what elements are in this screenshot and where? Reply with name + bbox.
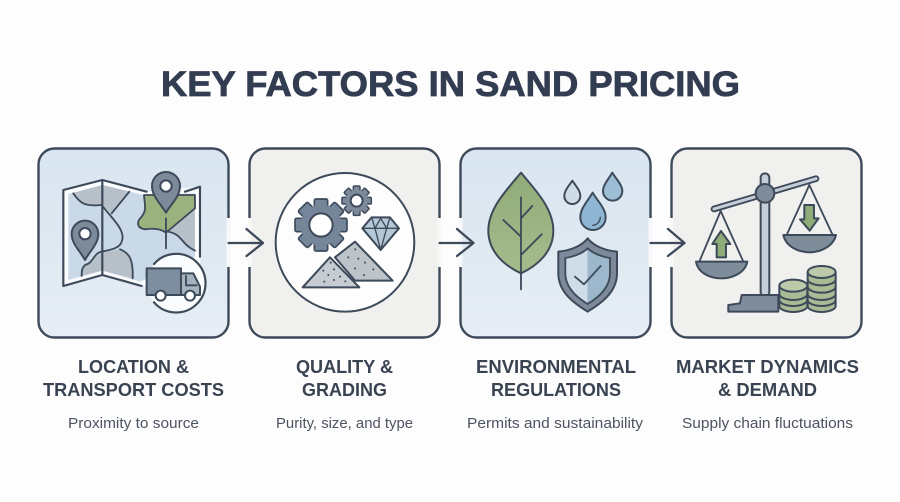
- text block: environmental regulations: Permits and sustainability: [467, 415, 644, 432]
- text block: environmental regulations: [467, 357, 644, 432]
- arrow: environmental to market: [650, 229, 684, 256]
- text block: location and transport costs: [43, 357, 224, 432]
- text block: quality and grading: Purity, size, and type: [276, 415, 413, 432]
- panel: quality and grading: [248, 148, 442, 338]
- icon: scale base: [728, 295, 778, 312]
- icon: left pan with up arrow: [696, 211, 747, 278]
- icon: diamond: [362, 217, 399, 250]
- icon: large map pin: [152, 172, 180, 213]
- text block: location and transport costs: LOCATION &: [78, 357, 189, 377]
- icon: shield with check: [558, 238, 617, 312]
- text block: market dynamics and demand: & DEMAND: [718, 380, 817, 400]
- icon: leaf, drops and shield: [488, 173, 622, 312]
- icon: back sand pile: [335, 242, 393, 281]
- icon: gears, diamond and sand piles: [276, 173, 414, 312]
- text block: quality and grading: [276, 357, 413, 432]
- title: KEY FACTORS IN SAND PRICING: [161, 65, 740, 104]
- icon: front sand pile: [303, 257, 359, 287]
- icon: scale beam: [714, 179, 816, 209]
- icon: large gear: [295, 199, 347, 251]
- icon: pivot: [756, 184, 774, 203]
- text block: market dynamics and demand: MARKET DYNAMICS: [676, 357, 859, 377]
- text block: environmental regulations: REGULATIONS: [491, 380, 621, 400]
- icon: leaf: [488, 173, 553, 289]
- icon: water drops: [564, 173, 622, 230]
- text block: quality and grading: GRADING: [302, 380, 387, 400]
- icon: short coin stack: [779, 280, 807, 312]
- arrow: location to quality: [228, 229, 263, 256]
- icon: balance scale with coins: [696, 173, 836, 312]
- panel: environmental regulations: [458, 148, 652, 338]
- text block: location and transport costs: TRANSPORT COSTS: [43, 380, 224, 400]
- arrow: quality to environmental: [440, 229, 474, 256]
- icon: right pan with down arrow: [783, 185, 836, 252]
- panel: market dynamics and demand: [670, 148, 862, 338]
- icon: scale post: [761, 173, 769, 297]
- icon: small map pin: [72, 221, 98, 260]
- text block: quality and grading: QUALITY &: [296, 357, 393, 377]
- text block: market dynamics and demand: [676, 357, 859, 432]
- icon: map with pins and truck: [63, 172, 206, 313]
- icon: tall coin stack: [808, 266, 836, 312]
- text block: market dynamics and demand: Supply chain fluctuations: [682, 415, 853, 432]
- text block: location and transport costs: Proximity to source: [68, 415, 199, 432]
- icon: small gear: [342, 186, 371, 215]
- icon: delivery truck: [147, 254, 206, 313]
- panel: location and transport costs: [38, 148, 230, 338]
- text block: environmental regulations: ENVIRONMENTAL: [476, 357, 636, 377]
